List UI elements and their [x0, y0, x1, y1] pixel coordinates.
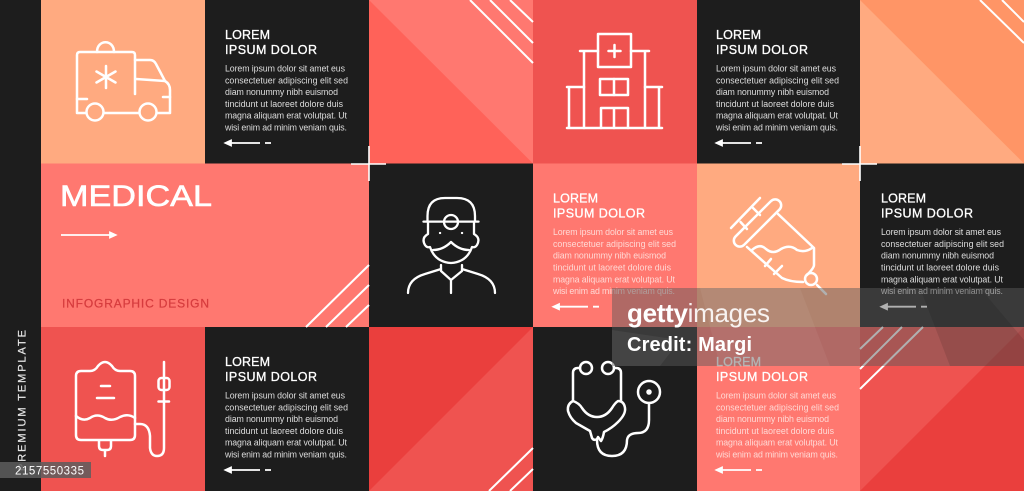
- icon: drip bag: [76, 362, 170, 456]
- body copy: consectetuer adipiscing elit sed: [716, 75, 839, 85]
- arrow: [882, 304, 927, 309]
- heading: [553, 192, 645, 221]
- heading: [716, 28, 808, 57]
- body copy: [880, 227, 1004, 296]
- body copy: Lorem ipsum dolor sit amet eus: [225, 64, 346, 74]
- body copy: diam nonummy nibh euismod: [881, 251, 994, 261]
- text block: panel one: [224, 28, 348, 146]
- heading: [881, 192, 973, 221]
- body copy: wisi enim ad minim veniam quis.: [715, 122, 838, 132]
- body copy: consectetuer adipiscing elit sed: [225, 75, 348, 85]
- panel: ambulance tile: [41, 0, 205, 164]
- body copy: tincidunt ut laoreet dolore duis: [225, 426, 344, 436]
- icon: syringe: [731, 197, 826, 294]
- panel: decorative triangles bottom right: [860, 327, 1024, 491]
- vertical label: PREMIUM TEMPLATE: [16, 330, 28, 471]
- arrow: [554, 304, 599, 309]
- body copy: wisi enim ad minim veniam quis.: [552, 286, 675, 296]
- body copy: [715, 390, 839, 459]
- body copy: diam nonummy nibh euismod: [553, 251, 666, 261]
- heading: IPSUM DOLOR: [553, 207, 645, 221]
- body copy: Lorem ipsum dolor sit amet eus: [553, 227, 674, 237]
- watermark logo: gettyimages: [627, 298, 770, 328]
- body copy: magna aliquam erat volutpat. Ut: [225, 111, 348, 121]
- text block: panel three: [552, 192, 676, 309]
- heading: [225, 28, 317, 57]
- icon: stethoscope: [568, 362, 660, 456]
- heading: IPSUM DOLOR: [225, 43, 317, 57]
- heading: [716, 355, 808, 384]
- text block: panel six: [715, 355, 839, 472]
- arrow: title: [61, 232, 116, 238]
- body copy: consectetuer adipiscing elit sed: [553, 239, 676, 249]
- body copy: tincidunt ut laoreet dolore duis: [716, 99, 835, 109]
- body copy: consectetuer adipiscing elit sed: [881, 239, 1004, 249]
- heading: LOREM: [225, 28, 270, 42]
- heading: IPSUM DOLOR: [225, 370, 317, 384]
- panel: medical title tile: [41, 164, 369, 327]
- panel: decorative triangles top centre: [369, 0, 533, 164]
- heading: LOREM: [225, 355, 270, 369]
- decorative diagonal lines on title tile: [306, 265, 369, 327]
- body copy: magna aliquam erat volutpat. Ut: [225, 438, 348, 448]
- icon: doctor: [408, 198, 495, 293]
- title: MEDICAL: [60, 180, 212, 213]
- body copy: diam nonummy nibh euismod: [716, 414, 829, 424]
- body copy: [552, 227, 676, 296]
- body copy: diam nonummy nibh euismod: [716, 87, 829, 97]
- heading: IPSUM DOLOR: [716, 370, 808, 384]
- body copy: Lorem ipsum dolor sit amet eus: [716, 390, 837, 400]
- panel: syringe tile: [697, 164, 860, 327]
- body copy: [224, 390, 348, 459]
- icon: hospital: [567, 34, 662, 128]
- arrow: [226, 468, 271, 472]
- panel: text tile salmon lower: [697, 327, 860, 491]
- heading: IPSUM DOLOR: [716, 43, 808, 57]
- body copy: wisi enim ad minim veniam quis.: [224, 449, 347, 459]
- cross marker right: [842, 146, 877, 181]
- body copy: wisi enim ad minim veniam quis.: [224, 122, 347, 132]
- heading: LOREM: [716, 28, 761, 42]
- body copy: wisi enim ad minim veniam quis.: [880, 286, 1003, 296]
- body copy: tincidunt ut laoreet dolore duis: [553, 263, 672, 273]
- watermark band: [612, 288, 1024, 366]
- body copy: magna aliquam erat volutpat. Ut: [881, 274, 1004, 284]
- heading: LOREM: [553, 192, 598, 206]
- arrow: [716, 140, 762, 146]
- icon: ambulance: [77, 42, 170, 120]
- text block: panel four: [880, 192, 1004, 309]
- body copy: [224, 64, 348, 132]
- heading: LOREM: [881, 192, 926, 206]
- text block: panel two: [715, 28, 839, 146]
- heading: [225, 355, 317, 384]
- body copy: magna aliquam erat volutpat. Ut: [716, 438, 839, 448]
- text block: panel five: [224, 355, 348, 472]
- body copy: diam nonummy nibh euismod: [225, 414, 338, 424]
- body copy: magna aliquam erat volutpat. Ut: [553, 274, 676, 284]
- body copy: consectetuer adipiscing elit sed: [225, 402, 348, 412]
- body copy: magna aliquam erat volutpat. Ut: [716, 111, 839, 121]
- body copy: diam nonummy nibh euismod: [225, 87, 338, 97]
- body copy: [715, 64, 839, 132]
- body copy: Lorem ipsum dolor sit amet eus: [881, 227, 1002, 237]
- panel: drip bag tile: [41, 327, 205, 491]
- body copy: tincidunt ut laoreet dolore duis: [881, 263, 1000, 273]
- cross marker left: [351, 146, 386, 181]
- panel: decorative triangles bottom centre: [369, 327, 533, 491]
- image id badge: 2157550335: [15, 466, 84, 478]
- image id badge: [0, 462, 91, 478]
- subtitle: INFOGRAPHIC DESIGN: [62, 296, 209, 310]
- body copy: tincidunt ut laoreet dolore duis: [225, 99, 344, 109]
- body copy: tincidunt ut laoreet dolore duis: [716, 426, 835, 436]
- panel: decorative triangles top right: [860, 0, 1024, 164]
- body copy: Lorem ipsum dolor sit amet eus: [716, 64, 837, 74]
- heading: LOREM: [716, 355, 761, 369]
- arrow: [716, 468, 762, 472]
- arrow: [226, 140, 271, 146]
- heading: IPSUM DOLOR: [881, 207, 973, 221]
- body copy: Lorem ipsum dolor sit amet eus: [225, 390, 346, 400]
- panel: hospital tile: [533, 0, 697, 164]
- body copy: consectetuer adipiscing elit sed: [716, 402, 839, 412]
- panel: text tile salmon: [533, 164, 697, 327]
- body copy: wisi enim ad minim veniam quis.: [715, 449, 838, 459]
- watermark credit: Credit: Margi: [627, 334, 752, 356]
